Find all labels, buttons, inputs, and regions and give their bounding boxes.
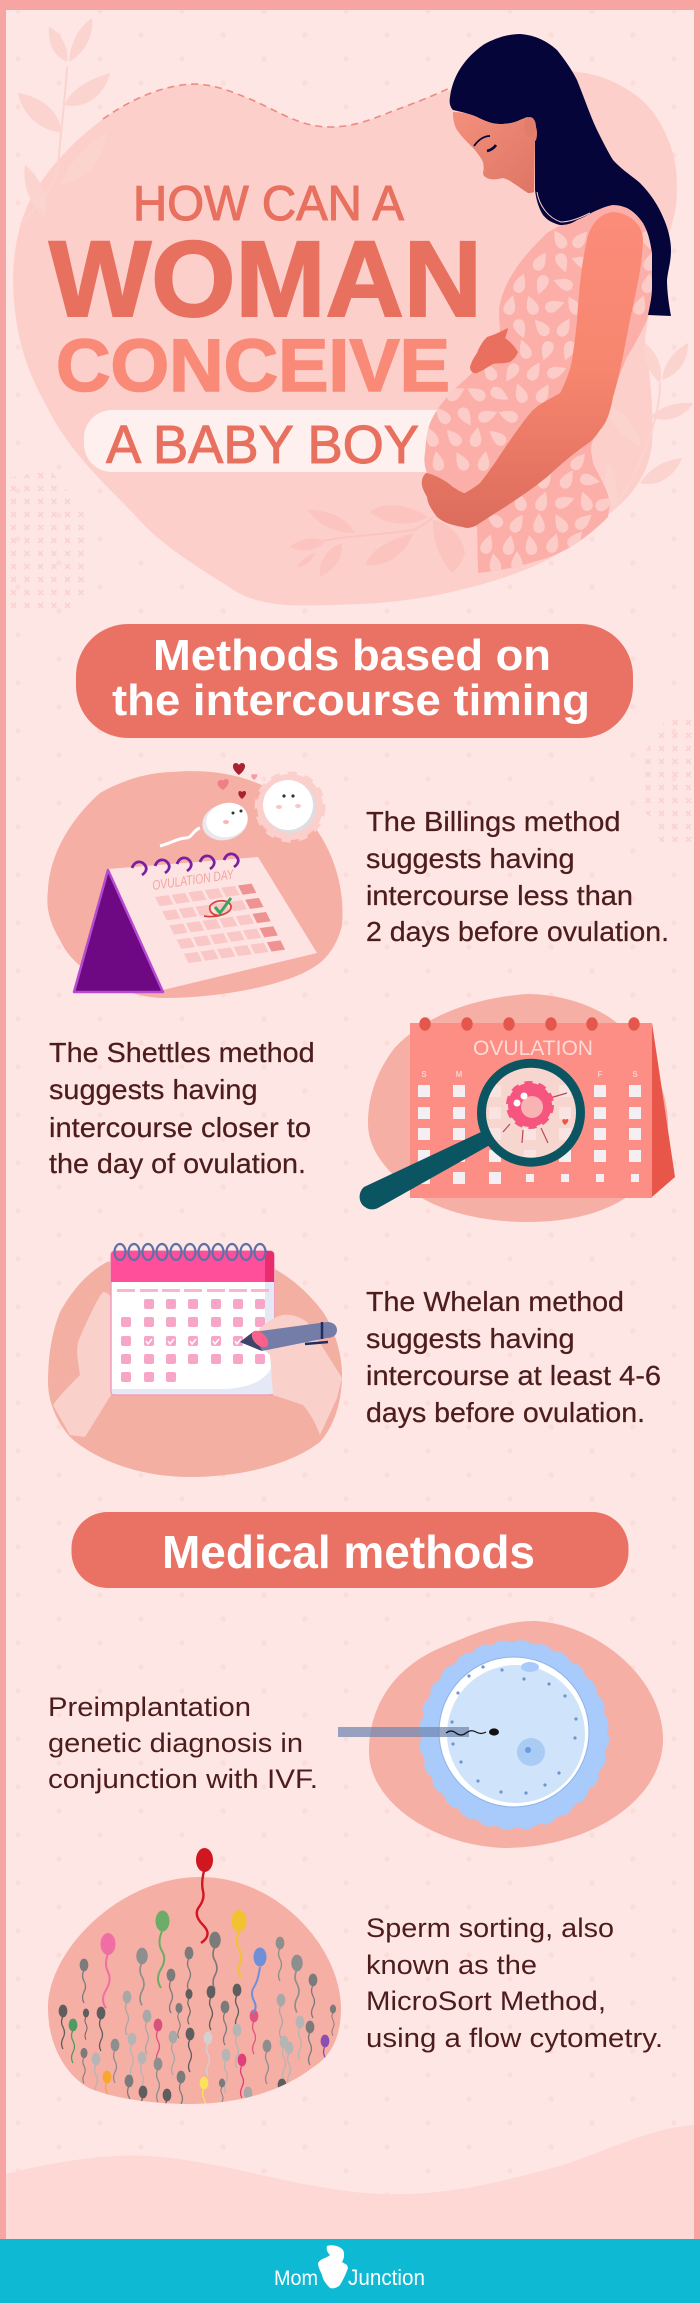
dashed outline bbox=[103, 84, 452, 127]
icon: pen bbox=[240, 1322, 337, 1351]
icon: sperm bbox=[446, 1728, 499, 1736]
heart-shaped blob bbox=[13, 71, 677, 605]
woman illustration bbox=[422, 34, 671, 574]
eye bbox=[487, 145, 496, 151]
yellow sperm bbox=[232, 1910, 246, 1977]
pink sperm bbox=[100, 1933, 116, 2008]
calendar triangle stand bbox=[74, 870, 163, 992]
panel: IVF egg bbox=[338, 1621, 663, 1848]
text: whelan method: suggests having bbox=[366, 1323, 574, 1354]
title line: conceive: CONCEIVE bbox=[56, 324, 450, 407]
text: sperm sorting: using a flow cytometry. bbox=[366, 2023, 663, 2053]
icon: egg corona bbox=[421, 1642, 607, 1828]
header text: Medical methods bbox=[162, 1526, 535, 1578]
title line: how can a: HOW CAN A bbox=[133, 177, 404, 231]
title line: a baby boy: A BABY BOY bbox=[106, 415, 419, 475]
leaves: top-left branch bbox=[18, 18, 110, 225]
icon: egg cytoplasm bbox=[447, 1665, 585, 1803]
calendar cells bbox=[121, 1299, 265, 1382]
arm bbox=[422, 212, 643, 528]
calendar grid bbox=[155, 884, 285, 963]
text: whelan method: intercourse at least 4-6 bbox=[366, 1360, 661, 1391]
text: whelan method: days before ovulation. bbox=[366, 1397, 645, 1428]
header text line 2: the intercourse timing bbox=[112, 676, 590, 725]
left hand and arm bbox=[53, 1292, 111, 1437]
icon: egg and sperm bbox=[160, 774, 323, 846]
cross pattern right bbox=[640, 716, 692, 842]
right hand and arm bbox=[253, 1315, 342, 1435]
text: sperm sorting: MicroSort Method, bbox=[366, 1986, 606, 2016]
panel: sperm sorting bbox=[48, 1848, 341, 2104]
text: shettles method bbox=[49, 1037, 315, 1179]
text: whelan method: The Whelan method bbox=[366, 1286, 624, 1317]
icon: egg membrane bbox=[439, 1657, 589, 1807]
text: sperm sorting bbox=[366, 1913, 663, 2053]
text: shettles method: intercourse closer to bbox=[49, 1112, 311, 1143]
polar body bbox=[521, 1662, 539, 1672]
red sperm bbox=[196, 1848, 213, 1943]
weekday letters bbox=[421, 1070, 638, 1079]
text: shettles method: the day of ovulation. bbox=[49, 1148, 306, 1179]
circled check bbox=[204, 901, 231, 917]
calendar rings bbox=[132, 854, 238, 875]
text: preimplantation diagnosis bbox=[48, 1692, 318, 1794]
text: billings method bbox=[366, 806, 669, 947]
hair highlight bbox=[537, 192, 590, 222]
calendar heading: OVULATION bbox=[473, 1037, 593, 1060]
small sperm bbox=[58, 1932, 336, 2104]
logo wordmark left: Mom bbox=[274, 2267, 318, 2290]
calendar caption: OVULATION DAY bbox=[151, 867, 235, 893]
calendar back flap bbox=[652, 1023, 675, 1197]
ovum character bbox=[503, 1083, 568, 1143]
nucleolus bbox=[525, 1747, 531, 1753]
blob bbox=[48, 1877, 341, 2104]
weekday dashes bbox=[117, 1289, 269, 1292]
logo bbox=[274, 2245, 425, 2290]
section header: intercourse timing bbox=[76, 624, 633, 738]
text: shettles method: suggests having bbox=[49, 1074, 258, 1105]
panel: billings method bbox=[47, 763, 343, 998]
fingernail bbox=[249, 1328, 271, 1350]
hero: title and illustration bbox=[8, 18, 693, 612]
weekday letters: M bbox=[456, 1070, 463, 1079]
dress pattern bbox=[423, 228, 659, 574]
logo mother and heart icon bbox=[318, 2245, 348, 2288]
title pill bbox=[84, 410, 464, 472]
eyebrow bbox=[474, 136, 490, 146]
text: billings method: 2 days before ovulation. bbox=[366, 916, 669, 947]
icon: desk calendar bbox=[74, 854, 317, 992]
text: sperm sorting: known as the bbox=[366, 1950, 537, 1980]
icon: notepad calendar bbox=[111, 1244, 274, 1395]
ear bbox=[524, 117, 536, 137]
text: sperm sorting: Sperm sorting, also bbox=[366, 1913, 614, 1943]
calendar header bbox=[111, 1251, 274, 1282]
green sperm bbox=[156, 1910, 170, 1988]
blob bbox=[369, 1621, 663, 1848]
calendar rings bbox=[419, 1017, 640, 1031]
logo wordmark right: Junction bbox=[348, 2265, 425, 2290]
icon: hearts bbox=[218, 763, 257, 799]
section header: medical methods bbox=[72, 1512, 628, 1588]
bottom wave bbox=[6, 2125, 694, 2240]
footer bar bbox=[0, 2239, 700, 2303]
hair bbox=[450, 34, 671, 316]
face bbox=[453, 112, 537, 193]
text: preimplantation diagnosis: conjunction with IVF. bbox=[48, 1764, 318, 1794]
calendar page bbox=[111, 1251, 274, 1395]
panel: whelan method bbox=[48, 1244, 342, 1477]
calendar grid bbox=[418, 1085, 641, 1184]
spiral rings bbox=[114, 1244, 266, 1260]
text: billings method: suggests having bbox=[366, 843, 574, 874]
weekday letters: S bbox=[421, 1070, 427, 1079]
calendar page curl bbox=[112, 1282, 274, 1394]
text: shettles method: The Shettles method bbox=[49, 1037, 315, 1068]
panel: shettles method bbox=[360, 994, 675, 1222]
blue sperm bbox=[252, 1948, 266, 2013]
text: billings method: The Billings method bbox=[366, 806, 620, 837]
upper hand bbox=[470, 328, 518, 373]
weekday letters: F bbox=[598, 1070, 603, 1079]
weekday letters: S bbox=[632, 1070, 638, 1079]
leaves: bottom branch bbox=[290, 505, 465, 577]
cell granules bbox=[450, 1665, 578, 1795]
text: preimplantation diagnosis: genetic diagnosis in bbox=[48, 1728, 303, 1758]
blob bbox=[368, 994, 668, 1222]
text: preimplantation diagnosis: Preimplantation bbox=[48, 1692, 251, 1722]
title line: woman: WOMAN bbox=[49, 218, 482, 339]
check marks bbox=[146, 1339, 241, 1344]
leaves: right branch bbox=[603, 343, 693, 510]
needle bbox=[338, 1727, 469, 1737]
icon: magnifying glass bbox=[360, 1063, 580, 1209]
blob bbox=[48, 1257, 342, 1477]
nucleus bbox=[517, 1738, 545, 1766]
text: billings method: intercourse less than bbox=[366, 880, 633, 911]
header text line 1: Methods based on bbox=[153, 631, 551, 680]
dress bbox=[424, 205, 653, 573]
blob bbox=[47, 771, 343, 998]
calendar page bbox=[410, 1023, 652, 1198]
text: whelan method bbox=[366, 1286, 661, 1428]
cross pattern left bbox=[8, 470, 92, 612]
